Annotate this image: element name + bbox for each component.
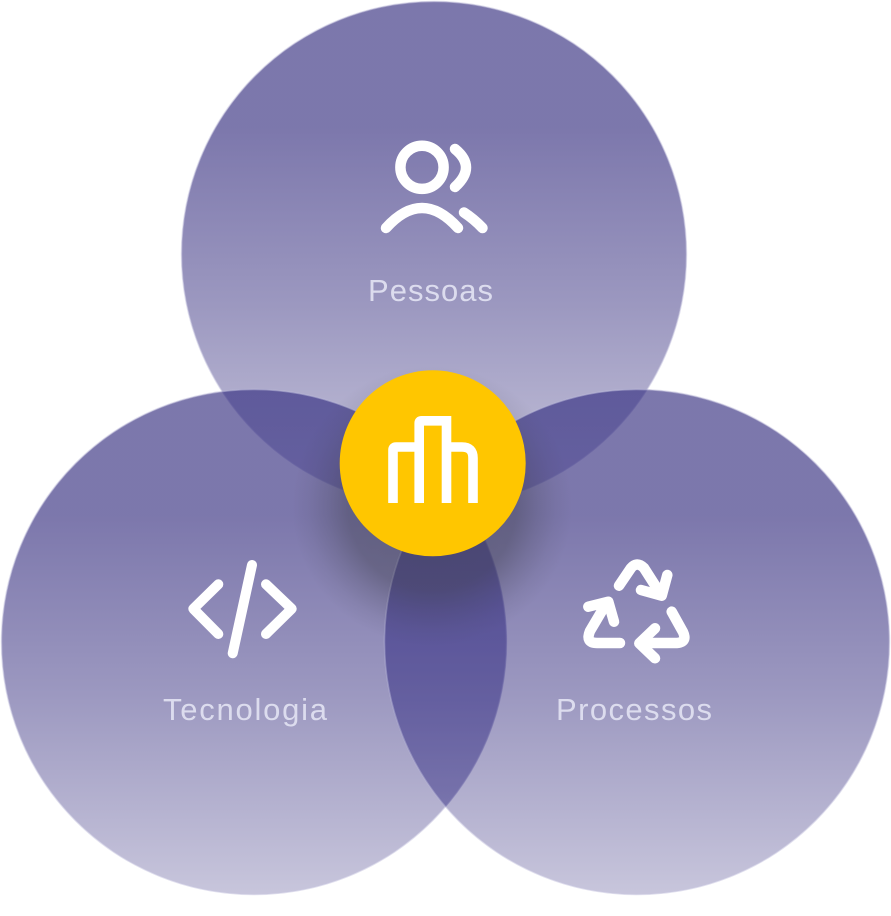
icon: recycle arrows (588, 564, 684, 658)
overlap: Pessoas and Tecnologia (222, 389, 356, 412)
panel: Pessoas circle (182, 2, 686, 506)
icon: people (386, 146, 482, 228)
overlap: Tecnologia and Processos (384, 551, 507, 807)
center badge (340, 370, 526, 556)
overlap: Pessoas and Processos (516, 389, 648, 421)
icon: building bars logo (393, 421, 473, 503)
heading: Processos: Processos (556, 692, 712, 727)
panel: Processos circle (384, 390, 890, 894)
heading: Tecnologia: Tecnologia (163, 692, 328, 727)
panel: Tecnologia circle (2, 390, 506, 894)
icon: code brackets (193, 565, 292, 653)
center badge shadow (292, 366, 572, 646)
heading: Pessoas: Pessoas (368, 273, 493, 308)
